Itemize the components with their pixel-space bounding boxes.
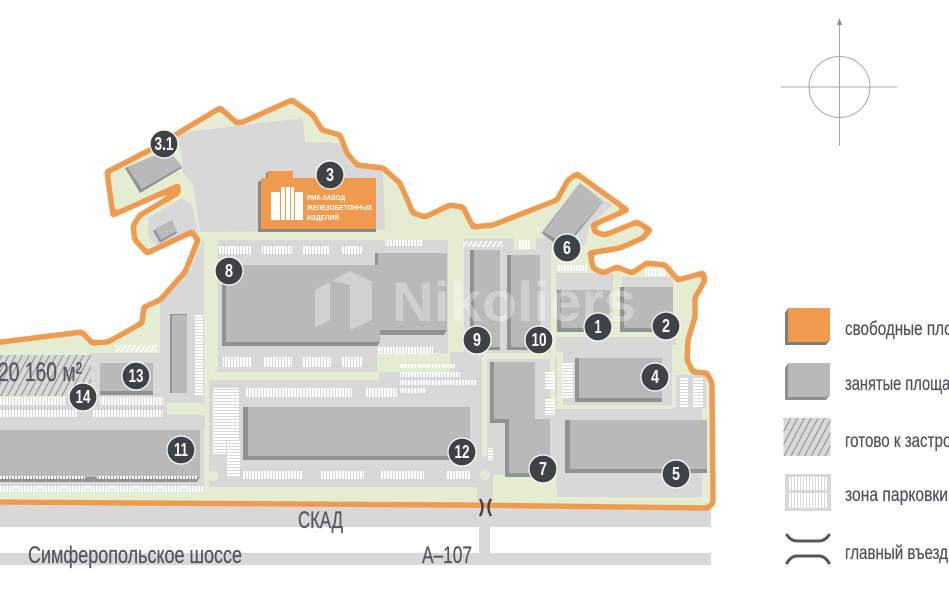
road label: Симферопольское шоссе: Симферопольское шоссе [28, 542, 242, 569]
building 6 [542, 183, 603, 242]
marker 12: 12 [454, 442, 470, 462]
marker 10: 10 [532, 330, 546, 350]
legend: hatch swatch [784, 418, 830, 456]
plant label: ИЗДЕЛИЙ [307, 213, 339, 222]
building 13 [100, 363, 153, 395]
legend: parking swatch [785, 474, 831, 511]
building 3.1 [125, 150, 182, 193]
legend: occupied space swatch [785, 363, 830, 400]
building 5 [565, 420, 707, 473]
marker 2 [652, 312, 680, 340]
building 4 [575, 358, 662, 402]
long building by the left road [170, 314, 187, 393]
marker 5: 5 [672, 464, 680, 484]
legend: free space swatch [785, 308, 830, 345]
marker 7 [529, 455, 557, 483]
road label: СКАД: СКАД [298, 507, 343, 534]
marker 9: 9 [473, 330, 481, 350]
marker 7: 7 [539, 459, 547, 479]
main entrance gate [480, 499, 491, 516]
building 8 [222, 253, 447, 346]
marker 2: 2 [662, 316, 670, 336]
plant label: ЖЕЛЕЗОБЕТОННЫХ [306, 205, 372, 212]
site boundary [0, 100, 713, 508]
marker 8 [215, 257, 243, 285]
site green area [0, 100, 713, 508]
marker 5 [662, 460, 690, 488]
building 11 [0, 430, 200, 482]
hatched plot: ready for construction [0, 355, 91, 396]
marker 1 [584, 313, 612, 341]
small building near 3.1 [153, 220, 177, 243]
building 10 [507, 255, 540, 350]
marker 3.1: 3.1 [154, 134, 174, 154]
marker 11: 11 [174, 440, 188, 460]
marker 14: 14 [76, 387, 90, 407]
building 3: orange precast plant [258, 171, 376, 232]
legend: entrance symbol [787, 535, 829, 563]
grey driveways and yards [0, 118, 706, 506]
roads [0, 505, 711, 565]
marker 3: 3 [326, 165, 334, 185]
legend [784, 308, 949, 564]
marker 9 [463, 326, 491, 354]
marker 13 [122, 362, 150, 390]
building 12 [243, 407, 470, 460]
compass [781, 18, 897, 146]
marker 10 [525, 326, 553, 354]
parking zones [0, 240, 703, 492]
marker 4 [641, 363, 669, 391]
marker 6 [553, 234, 581, 262]
marker 3 [316, 161, 344, 189]
building 7 [490, 362, 550, 477]
factory icon [271, 187, 303, 220]
marker 13: 13 [128, 366, 144, 386]
marker 4: 4 [651, 367, 659, 387]
road label: А-107: А–107 [422, 542, 472, 569]
plot area label: 20 160 м² [0, 357, 82, 387]
marker 3.1 [150, 130, 178, 158]
marker 14 [69, 383, 97, 411]
plant label [306, 195, 372, 222]
marker 6: 6 [563, 238, 571, 258]
building 2 [620, 287, 673, 332]
building 9 [470, 250, 500, 350]
building 1 [557, 290, 610, 332]
marker 12 [448, 438, 476, 466]
marker 11 [167, 436, 195, 464]
watermark: Nikoliers [392, 270, 636, 333]
marker 8: 8 [225, 261, 233, 281]
green strips [0, 234, 676, 503]
marker 1: 1 [594, 317, 602, 337]
plant label: РМК-ЗАВОД [307, 195, 345, 202]
